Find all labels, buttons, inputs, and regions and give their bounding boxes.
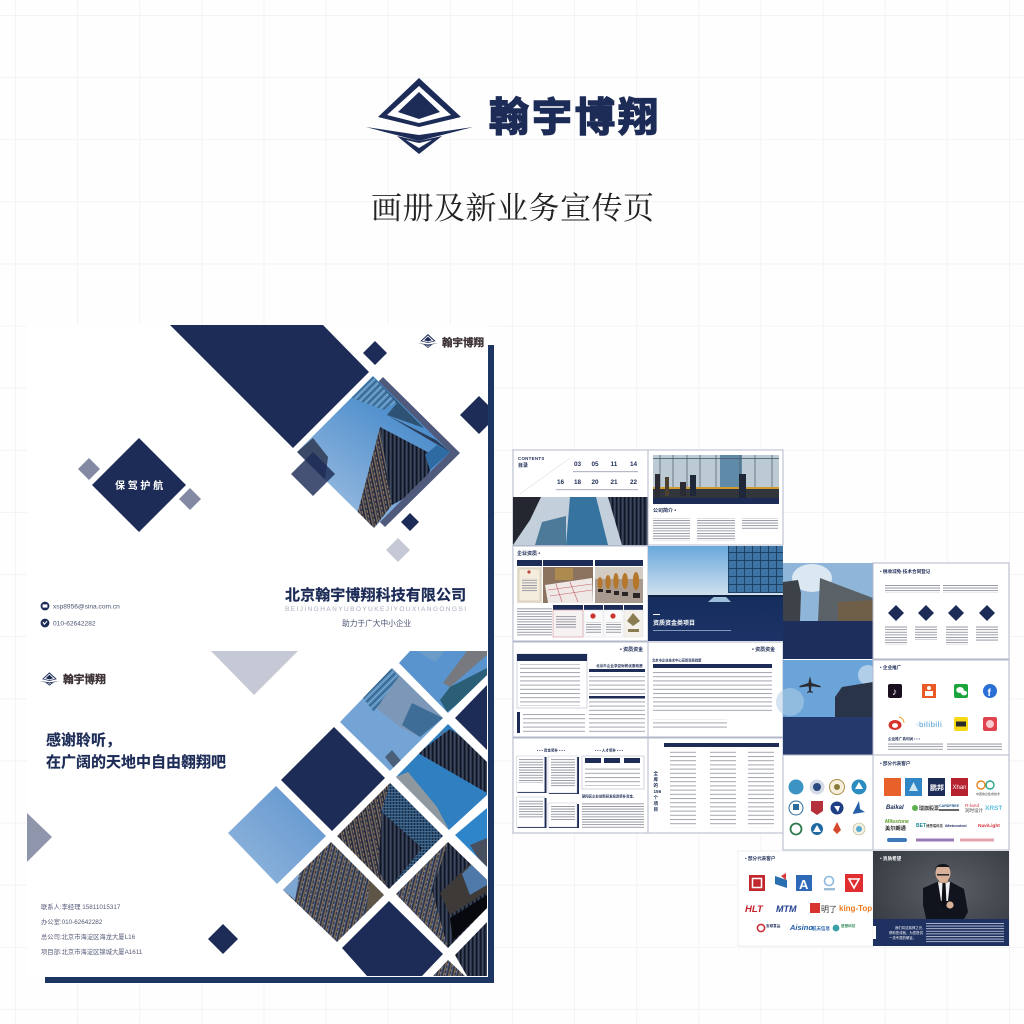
company name: 北京翰宇博翔科技有限公司 xyxy=(285,586,466,604)
closing message xyxy=(46,731,226,771)
heading: 资质资金: • 资质资金 xyxy=(620,646,643,653)
translucent diamond xyxy=(291,452,335,496)
divider title: 资质资金类项目 xyxy=(653,619,695,627)
photo tile: tower centre xyxy=(337,783,443,889)
panel: funding policy page xyxy=(513,642,648,737)
contact phone: 010-62642282 xyxy=(53,620,96,628)
logos row 1 xyxy=(884,778,1000,796)
page numbers: 05 xyxy=(592,461,599,468)
heading: • 税收减免-技术合同登记 xyxy=(880,568,931,575)
page numbers: 22 xyxy=(630,479,638,486)
article heading: 朝阳区企业创新研发投资奖补资金, xyxy=(582,794,634,798)
logos row 2: king-Top xyxy=(839,904,872,913)
photo: people at the window xyxy=(653,455,779,498)
logos row 2: CARDFREE xyxy=(939,804,960,808)
page numbers: 20 xyxy=(592,479,599,486)
company pinyin: BEIJINGHANYUBOYUKEJIYOUXIANGONGSI xyxy=(285,606,466,613)
panel: funding project divider xyxy=(648,546,783,641)
logos row 2 xyxy=(745,903,872,915)
back cover logo: 翰宇博翔 xyxy=(63,673,106,686)
divider rule xyxy=(653,614,660,615)
photo caption band xyxy=(653,498,779,504)
icon: yellow app xyxy=(954,717,968,731)
logos row 3: 博恩瑞科技 xyxy=(926,823,944,828)
panel: representative clients page 2 xyxy=(738,851,873,946)
logos row 3: Aisino xyxy=(789,923,813,932)
divider subtitle xyxy=(653,630,731,631)
promotion subheading: 企业推广真利润 • • • xyxy=(888,736,921,741)
page numbers: 16 xyxy=(557,479,565,486)
benefit text xyxy=(885,625,998,645)
heading: • 资质资金 xyxy=(752,646,775,653)
page numbers: 03 xyxy=(574,461,582,468)
photo tile: bottom small xyxy=(433,960,465,976)
contact details: 办公室:010-62642282 xyxy=(41,917,103,926)
policy box xyxy=(517,654,587,708)
photo tile: bottom right xyxy=(455,922,487,976)
panel: promotion page xyxy=(873,660,1009,755)
benefit diamonds xyxy=(888,605,995,621)
icon: weibo xyxy=(888,717,904,730)
contact details: 总公司:北京市海淀区海龙大厦L16 xyxy=(41,932,136,941)
grey triangle xyxy=(27,813,52,862)
logo grid xyxy=(788,780,866,835)
icon: bilibili: ▫bilibili xyxy=(916,720,942,729)
quote: 帮助您成就，为您提供 xyxy=(889,930,924,935)
speaker portrait xyxy=(923,864,968,930)
photo tile: right sliver xyxy=(455,808,487,867)
navy mosaic tile bottom xyxy=(342,901,443,976)
badge: 保驾护航: 保驾护航 xyxy=(115,479,166,492)
panel: company intro page xyxy=(648,450,783,545)
logos row 4 xyxy=(887,838,994,842)
biography text xyxy=(926,923,1004,943)
grey diamond left xyxy=(78,458,100,480)
pale diamond xyxy=(386,538,410,562)
back cover logo xyxy=(40,672,106,686)
panel: speaker page xyxy=(873,851,1009,946)
contact phone xyxy=(41,619,96,628)
panel: funding table page xyxy=(648,642,783,737)
trophies photo xyxy=(595,567,643,603)
logos row 1: Xhan xyxy=(952,785,967,791)
closing message: 感谢聆听， xyxy=(46,731,121,749)
panel: tax reduction photo xyxy=(783,563,873,659)
logos row 2: 润时设计 xyxy=(965,807,983,814)
large navy shape xyxy=(170,325,369,448)
contents heading: CONTENTS xyxy=(518,456,545,461)
heading: 公司简介: 公司简介 • xyxy=(653,507,676,514)
icon: airplane xyxy=(799,676,821,693)
icon: wechat xyxy=(954,684,968,698)
logos row 3 xyxy=(757,923,856,932)
article text xyxy=(582,802,644,828)
icon: toutiao orange xyxy=(922,684,936,698)
heading: 企业资质: 企业资质 • xyxy=(517,550,540,557)
icon: facebook: f xyxy=(988,688,992,699)
closing message: 在广阔的天地中自由翱翔吧 xyxy=(46,753,226,771)
logos row 2: 明了 xyxy=(821,905,837,914)
frame bars xyxy=(45,345,494,983)
vertical title: 目 xyxy=(654,807,658,813)
logo wordmark: 翰宇博翔 xyxy=(489,96,661,140)
vertical title: 156 xyxy=(654,789,662,794)
vertical title xyxy=(654,770,662,813)
small navy diamond lower xyxy=(401,513,419,531)
project table xyxy=(664,743,779,828)
policy side table xyxy=(517,712,585,733)
navy mosaic tile right xyxy=(455,685,487,750)
logos row 1: 鹏邦 xyxy=(930,783,944,792)
vertical title: 的 xyxy=(654,782,658,789)
table title: 北京市企业享受财税优惠政策 xyxy=(596,663,643,668)
logos row 2: HLT xyxy=(745,904,764,915)
badge: 保驾护航 xyxy=(92,438,186,532)
contents photo xyxy=(513,497,648,545)
panel: brochure back cover xyxy=(27,650,488,977)
panel: contents page xyxy=(513,450,648,545)
contact details: 项目部:北京市海淀区锦城大厦A1611 xyxy=(41,947,143,956)
pale triangle xyxy=(211,651,298,695)
panel: airplane photo xyxy=(776,660,878,755)
panel: tax reduction page xyxy=(873,563,1009,659)
panel: brochure cover xyxy=(27,325,488,650)
main logo xyxy=(366,78,661,154)
document cards xyxy=(516,756,579,828)
right navy diamond xyxy=(460,396,488,434)
logos row 2 xyxy=(886,803,1002,814)
photo tile: blue sky tower xyxy=(396,724,487,830)
panel: qualifications page xyxy=(513,546,648,641)
photo tile: tower lower right xyxy=(396,842,487,948)
panel: documents page: • • • 人才奖补 • • • xyxy=(595,748,624,752)
small navy diamond xyxy=(363,341,387,365)
cover logo xyxy=(418,334,484,349)
quote xyxy=(889,925,924,940)
logos row 3: Milestone xyxy=(885,819,909,825)
page numbers: 14 xyxy=(630,461,638,468)
logos row 3: 安硕食品 xyxy=(766,923,781,928)
policy table xyxy=(653,664,772,730)
panel: client logos left xyxy=(783,755,873,850)
logos row 3: BET xyxy=(916,823,926,829)
page numbers: 21 xyxy=(610,479,618,486)
logos row 2: XRST xyxy=(985,805,1002,812)
icon: logo mark xyxy=(366,78,473,154)
policy table xyxy=(589,669,645,735)
vertical title: 全 xyxy=(654,770,658,776)
contact details: 联系人:李经理 15811015317 xyxy=(41,902,121,911)
page numbers: 11 xyxy=(610,461,618,468)
certificate photo xyxy=(517,567,542,603)
panel: project list page xyxy=(648,738,783,833)
photo tile: top corner xyxy=(399,651,487,713)
heading: • 企业推广 xyxy=(880,664,902,671)
grey diamond right xyxy=(179,488,201,510)
table headers xyxy=(517,560,643,566)
vertical title: 个 xyxy=(654,795,658,800)
navy caption band xyxy=(873,919,1009,946)
icon: tiktok: ♪ xyxy=(892,687,897,698)
quote: 我们将这精神之光, xyxy=(895,925,923,930)
panel: contents page: 目录 xyxy=(518,462,528,469)
logos row 1: 中国信息集成技术 xyxy=(976,791,1000,796)
logos row 2: 瑞旗股票 xyxy=(919,805,939,812)
photo: skyscrapers looking up xyxy=(297,376,450,528)
contact email xyxy=(41,602,120,610)
slate backing diamond xyxy=(308,377,460,527)
slogan: 助力于广大中小企业 xyxy=(342,618,412,628)
light blue mosaic tile xyxy=(228,786,326,884)
heading: • 部分代表客户 xyxy=(745,855,775,862)
headings: • • • 资金奖补 • • • xyxy=(537,748,566,752)
vertical title: 项 xyxy=(654,801,658,807)
licence cards xyxy=(553,605,643,637)
certificates on table photo xyxy=(543,567,593,603)
cover logo: 翰宇博翔 xyxy=(442,336,484,349)
logos row 3: 盛景科技 xyxy=(841,923,856,928)
page numbers xyxy=(557,461,638,486)
contact details xyxy=(41,902,143,956)
photo tile: glass building xyxy=(340,668,443,771)
logos row 3: iMetcontrol xyxy=(945,823,967,828)
logos row 2: Baikal xyxy=(886,805,904,811)
talent box xyxy=(582,756,644,789)
page numbers: 18 xyxy=(574,479,582,486)
title: 画册及新业务宣传页 xyxy=(371,191,654,226)
logos row 2: MTM xyxy=(776,904,797,914)
logos row 3: 航天信息 xyxy=(812,925,830,932)
intro text xyxy=(885,585,998,593)
logos row 3: NaviLight xyxy=(978,823,1000,829)
logos row 1: A xyxy=(799,877,809,892)
quote: 一流专属的硬证。 xyxy=(889,935,916,940)
icon: red app xyxy=(983,717,997,731)
heading: • 部分代表客户 xyxy=(880,760,910,767)
panel: documents page xyxy=(513,738,648,833)
heading: • 资质希望 xyxy=(880,855,902,862)
qualifications text xyxy=(517,608,552,637)
vertical title: 库 xyxy=(654,776,658,783)
logos row 3: 美尔朗通 xyxy=(885,824,907,832)
sub heading: 北京市企业技术中心高新资质政策 xyxy=(652,658,702,662)
panel: representative clients page xyxy=(873,755,1009,850)
logos row 2: R-land xyxy=(965,803,979,809)
intro text columns xyxy=(653,518,778,541)
promotion text xyxy=(888,743,1002,750)
logos row 3 xyxy=(885,819,1000,832)
navy mosaic tile top xyxy=(281,727,385,831)
small navy diamond xyxy=(208,924,238,954)
contact email: xsp8956@sina.com.cn xyxy=(53,604,120,610)
photo tile: tower lower left xyxy=(283,842,384,942)
